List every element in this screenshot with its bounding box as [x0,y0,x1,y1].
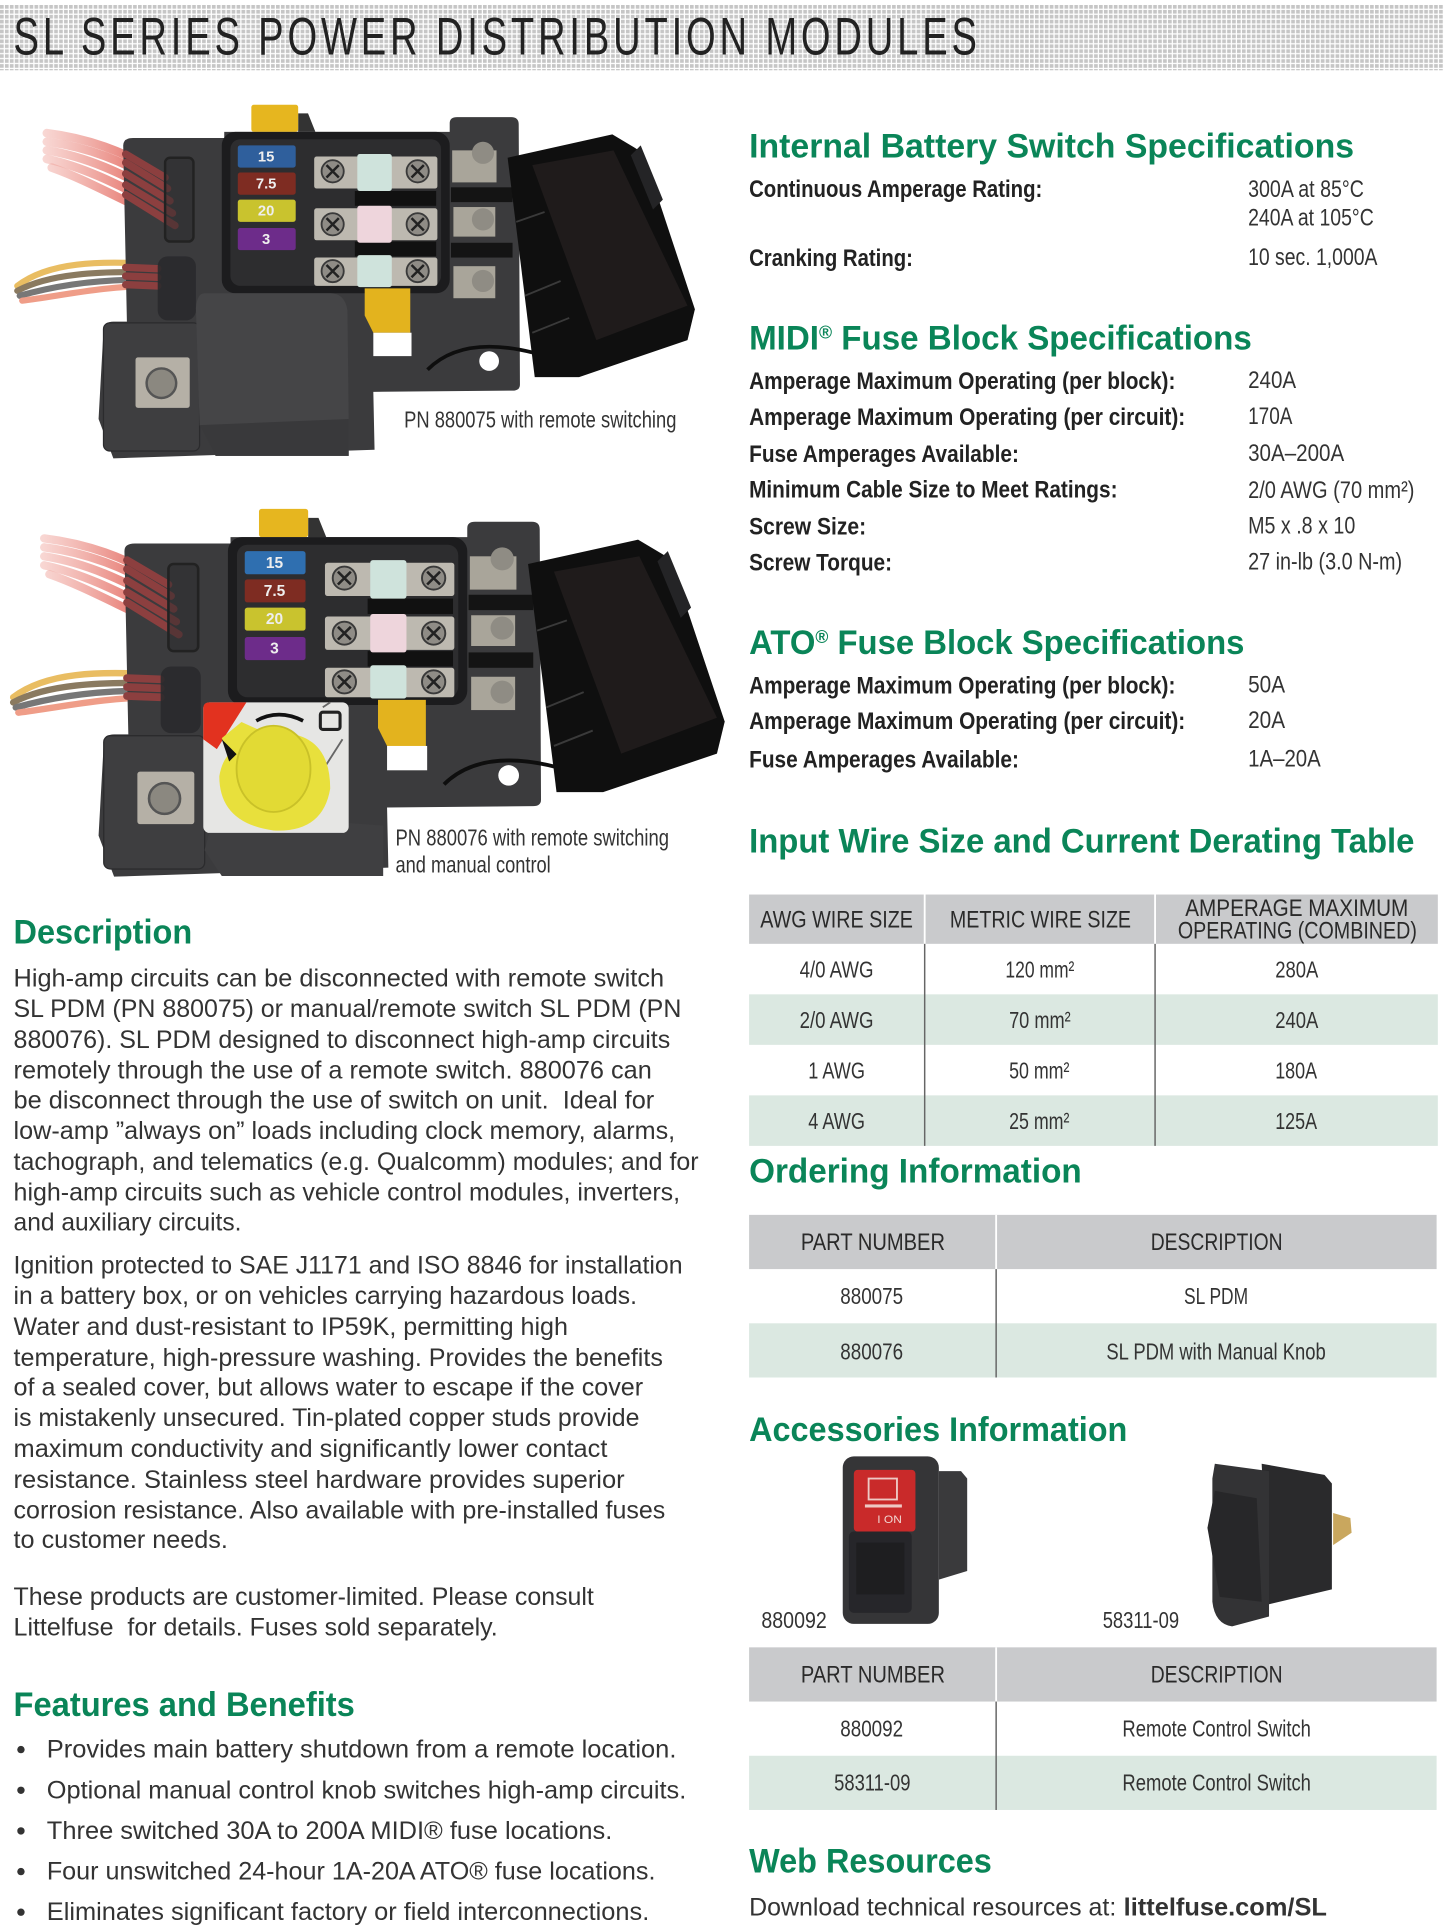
text block: description paragraph 2: of a sealed cover, but allows water to escape if the cover [14,1373,643,1401]
ATO fuses: 7.5 [256,177,276,193]
bottom yellow latch [365,288,410,333]
text block: description paragraph 2: in a battery box, or on vehicles carrying hazardous loads. [14,1282,637,1310]
heading: Internal Battery Switch Specifications [749,127,1354,165]
base plate [99,522,541,877]
table: ordering information: PART NUMBER [801,1229,945,1256]
text block: description paragraph 1: SL PDM (PN 880075) or manual/remote switch SL PDM (PN [14,995,681,1023]
spec rows: 240A [1248,367,1296,394]
table: input wire size and current derating: 50 mm² [1009,1057,1070,1083]
spec rows: Amperage Maximum Operating (per circuit): [749,708,1185,735]
heading: description: Description [14,913,192,951]
spec rows: 300A at 85°C [1248,176,1364,203]
icon: switch 880092 [843,1456,967,1624]
text block: description paragraph 2: is mistakenly unsecured. Tin-plated copper studs provide [14,1404,639,1432]
fuse frame [228,537,467,705]
table: input wire size and current derating: 1 AWG [808,1057,865,1083]
text block: description paragraph 2: corrosion resistance. Also available with pre-installed fuses [14,1497,665,1525]
table: ordering information: DESCRIPTION [1151,1229,1283,1256]
lower-left terminal box [104,736,205,869]
relay block [196,293,349,456]
spec rows: Cranking Rating: [749,245,913,272]
text block: availability note: These products are customer-limited. Please consult [14,1583,594,1611]
text block: web resources link [749,1893,1327,1921]
list: features: Optional manual control knob switches high-amp circuits. [47,1776,686,1804]
text block: description paragraph 1: low-amp ”always on” loads including clock memory, alarms, [14,1117,675,1145]
table: input wire size and current derating: 240A [1275,1007,1319,1033]
spec rows: 240A at 105°C [1248,205,1374,232]
product photo: PN 880076 [13,509,725,877]
table: input wire size and current derating: METRIC WIRE SIZE [950,906,1131,933]
bottom yellow latch [378,700,426,746]
ATO fuses [245,551,306,660]
table: input wire size and current derating: 125A [1275,1108,1317,1134]
spec rows: Fuse Amperages Available: [749,441,1019,468]
list: features: Eliminates significant factory or field interconnections. [47,1898,649,1926]
text block: description paragraph 2: maximum conductivity and significantly lower contact [14,1435,607,1463]
top latch housing [298,113,315,132]
table: accessories: Remote Control Switch [1122,1770,1311,1796]
spec rows: Continuous Amperage Rating: [749,176,1042,203]
table: input wire size and current derating: 120 mm² [1005,956,1075,982]
manual control panel [203,702,383,876]
spec rows: Minimum Cable Size to Meet Ratings: [749,477,1117,504]
fuse frame [222,132,450,293]
table: input wire size and current derating: 4/0 AWG [800,956,874,982]
text block: description paragraph 1: tachograph, and telematics (e.g. Qualcomm) modules; and for [14,1148,699,1176]
spec rows: 2/0 AWG (70 mm²) [1248,477,1414,504]
wires [17,133,172,301]
bus studs [451,142,513,298]
table: ordering information: SL PDM [1184,1283,1248,1309]
heading: Fuse Block Specifications [828,624,1244,662]
lower-left terminal box [103,323,200,451]
title: SL SERIES POWER DISTRIBUTION MODULES [14,6,977,66]
connectors [168,564,198,651]
spec rows: 27 in-lb (3.0 N-m) [1248,548,1402,575]
table: input wire size and current derating: AWG WIRE SIZE [760,906,913,933]
text block: web resources link: littelfuse.com/SL [1124,1893,1327,1921]
heading: MIDI [749,320,822,358]
table: input wire size and current derating: 180A [1275,1057,1317,1083]
product photo: PN 880075 [17,105,695,458]
heading: Fuse Block Specifications [832,320,1252,358]
spec rows: 30A–200A [1248,440,1344,467]
text block: description paragraph 2: to customer needs. [14,1526,228,1554]
spec rows [749,671,1321,773]
heading: ® [815,626,829,647]
spec rows: 20A [1248,707,1285,734]
list: features: Provides main battery shutdown from a remote location. [47,1736,676,1764]
panel: ATO fuse block specifications [749,624,1321,773]
table: ordering information [749,1215,1437,1378]
top latch housing [308,518,326,537]
heading: features and benefits: Features and Benefits [14,1686,355,1724]
text block: description paragraph 2: Ignition protected to SAE J1171 and ISO 8846 for installation [14,1251,683,1279]
ATO fuses [238,145,296,250]
table: input wire size and current derating: 280A [1275,956,1319,982]
text block: description paragraph 2 [14,1251,683,1554]
text block: description paragraph 1: high-amp circuits such as vehicle control modules, inverters, [14,1179,680,1207]
table: input wire size and current derating: AMPERAGE MAXIMUM [1185,895,1408,922]
heading: ® [819,322,832,343]
table: input wire size and current derating: 2/0 AWG [800,1007,874,1033]
table: accessories: PART NUMBER [801,1662,945,1689]
spec rows: 50A [1248,671,1285,698]
ATO fuses: 20 [258,204,274,220]
text block: description paragraph 1: be disconnect through the use of switch on unit. Ideal for [14,1086,654,1114]
label: 880092: 880092 [761,1607,827,1633]
base plate [99,117,520,458]
spec rows: Amperage Maximum Operating (per block): [749,368,1175,395]
table: accessories: 880092 [840,1715,903,1741]
table: ordering information: SL PDM with Manual Knob [1106,1338,1326,1364]
ATO fuses: 3 [270,641,279,658]
mounting hole [498,765,519,786]
spec rows: Amperage Maximum Operating (per block): [749,672,1175,699]
text block: description paragraph 2: resistance. Stainless steel hardware provides superior [14,1466,625,1494]
table: ordering information: 880076 [840,1338,903,1364]
list: features: Three switched 30A to 200A MIDI® fuse locations. [47,1817,612,1845]
text block: description paragraph 2: Water and dust-resistant to IP59K, permitting high [14,1313,568,1341]
table: accessories: DESCRIPTION [1151,1662,1283,1689]
list: features: Four unswitched 24-hour 1A-20A ATO® fuse locations. [47,1858,655,1886]
spec rows [749,367,1414,576]
caption: PN 880076: PN 880076 with remote switching [395,824,669,850]
label: 58311-09: 58311-09 [1103,1607,1179,1633]
table: input wire size and current derating: 4 AWG [808,1108,865,1134]
ATO fuses: 3 [262,232,270,248]
ATO fuses: 20 [266,611,283,628]
spec rows: Screw Size: [749,514,866,541]
hinged cover [444,540,725,792]
text block: description paragraph 2: temperature, high-pressure washing. Provides the benefits [14,1344,663,1372]
list: features [17,1736,686,1926]
heading: wire size table: Input Wire Size and Current Derating Table [749,822,1414,860]
panel: internal battery switch specifications [749,127,1377,272]
spec rows: Amperage Maximum Operating (per circuit): [749,404,1185,431]
heading: ATO [749,624,819,662]
caption: PN 880076: and manual control [395,851,551,877]
table: input wire size and current derating: 25 mm² [1009,1108,1070,1134]
text block: availability note [14,1583,594,1642]
title band [0,5,1444,70]
hinged cover [428,134,695,377]
MIDI fuses [325,560,454,699]
ATO fuses: 15 [266,555,284,572]
heading: accessories information: Accessories Information [749,1411,1127,1449]
MIDI fuses [314,154,437,287]
ATO fuses: 7.5 [264,583,286,600]
wires [13,538,176,713]
spec rows: 1A–20A [1248,745,1321,772]
table: input wire size and current derating: 70 mm² [1009,1007,1071,1033]
mounting hole [479,351,499,371]
text block: description paragraph 1: remotely through the use of a remote switch. 880076 can [14,1057,652,1085]
spec rows: M5 x .8 x 10 [1248,513,1355,540]
top yellow latch [259,509,308,537]
bus studs [469,547,533,710]
dark wire ends [126,154,175,286]
text block: description paragraph 1: High-amp circuits can be disconnected with remote switch [14,964,664,992]
panel: MIDI fuse block specifications [749,320,1414,576]
heading: ordering information: Ordering Information [749,1152,1082,1190]
spec rows: Fuse Amperages Available: [749,746,1019,773]
table: accessories: Remote Control Switch [1122,1715,1311,1741]
table: accessories [749,1647,1437,1810]
dark wire ends [127,560,179,697]
top yellow latch [251,105,298,132]
text block: description paragraph 1: 880076). SL PDM designed to disconnect high-amp circuits [14,1026,670,1054]
caption: PN 880076 [395,824,669,877]
spec rows: 170A [1248,403,1292,430]
heading: web resources: Web Resources [749,1842,992,1880]
table: ordering information: 880075 [840,1283,903,1309]
ATO fuses: 15 [258,149,274,165]
caption: PN 880075: PN 880075 with remote switching [404,407,676,433]
text block: description paragraph 1: and auxiliary circuits. [14,1208,241,1236]
spec rows: 10 sec. 1,000A [1248,244,1377,271]
table: input wire size and current derating [749,895,1438,1146]
spec rows [749,176,1377,272]
icon: switch 58311-09 [1207,1464,1352,1626]
icon: switch 880092: I ON [877,1514,902,1526]
text block: description paragraph 1 [14,964,699,1236]
connectors [165,158,193,242]
text block: web resources link: Download technical resources at: [749,1893,1116,1921]
spec rows: Screw Torque: [749,549,892,576]
text block: availability note: Littelfuse for details. Fuses sold separately. [14,1614,498,1642]
table: accessories: 58311-09 [834,1770,911,1796]
